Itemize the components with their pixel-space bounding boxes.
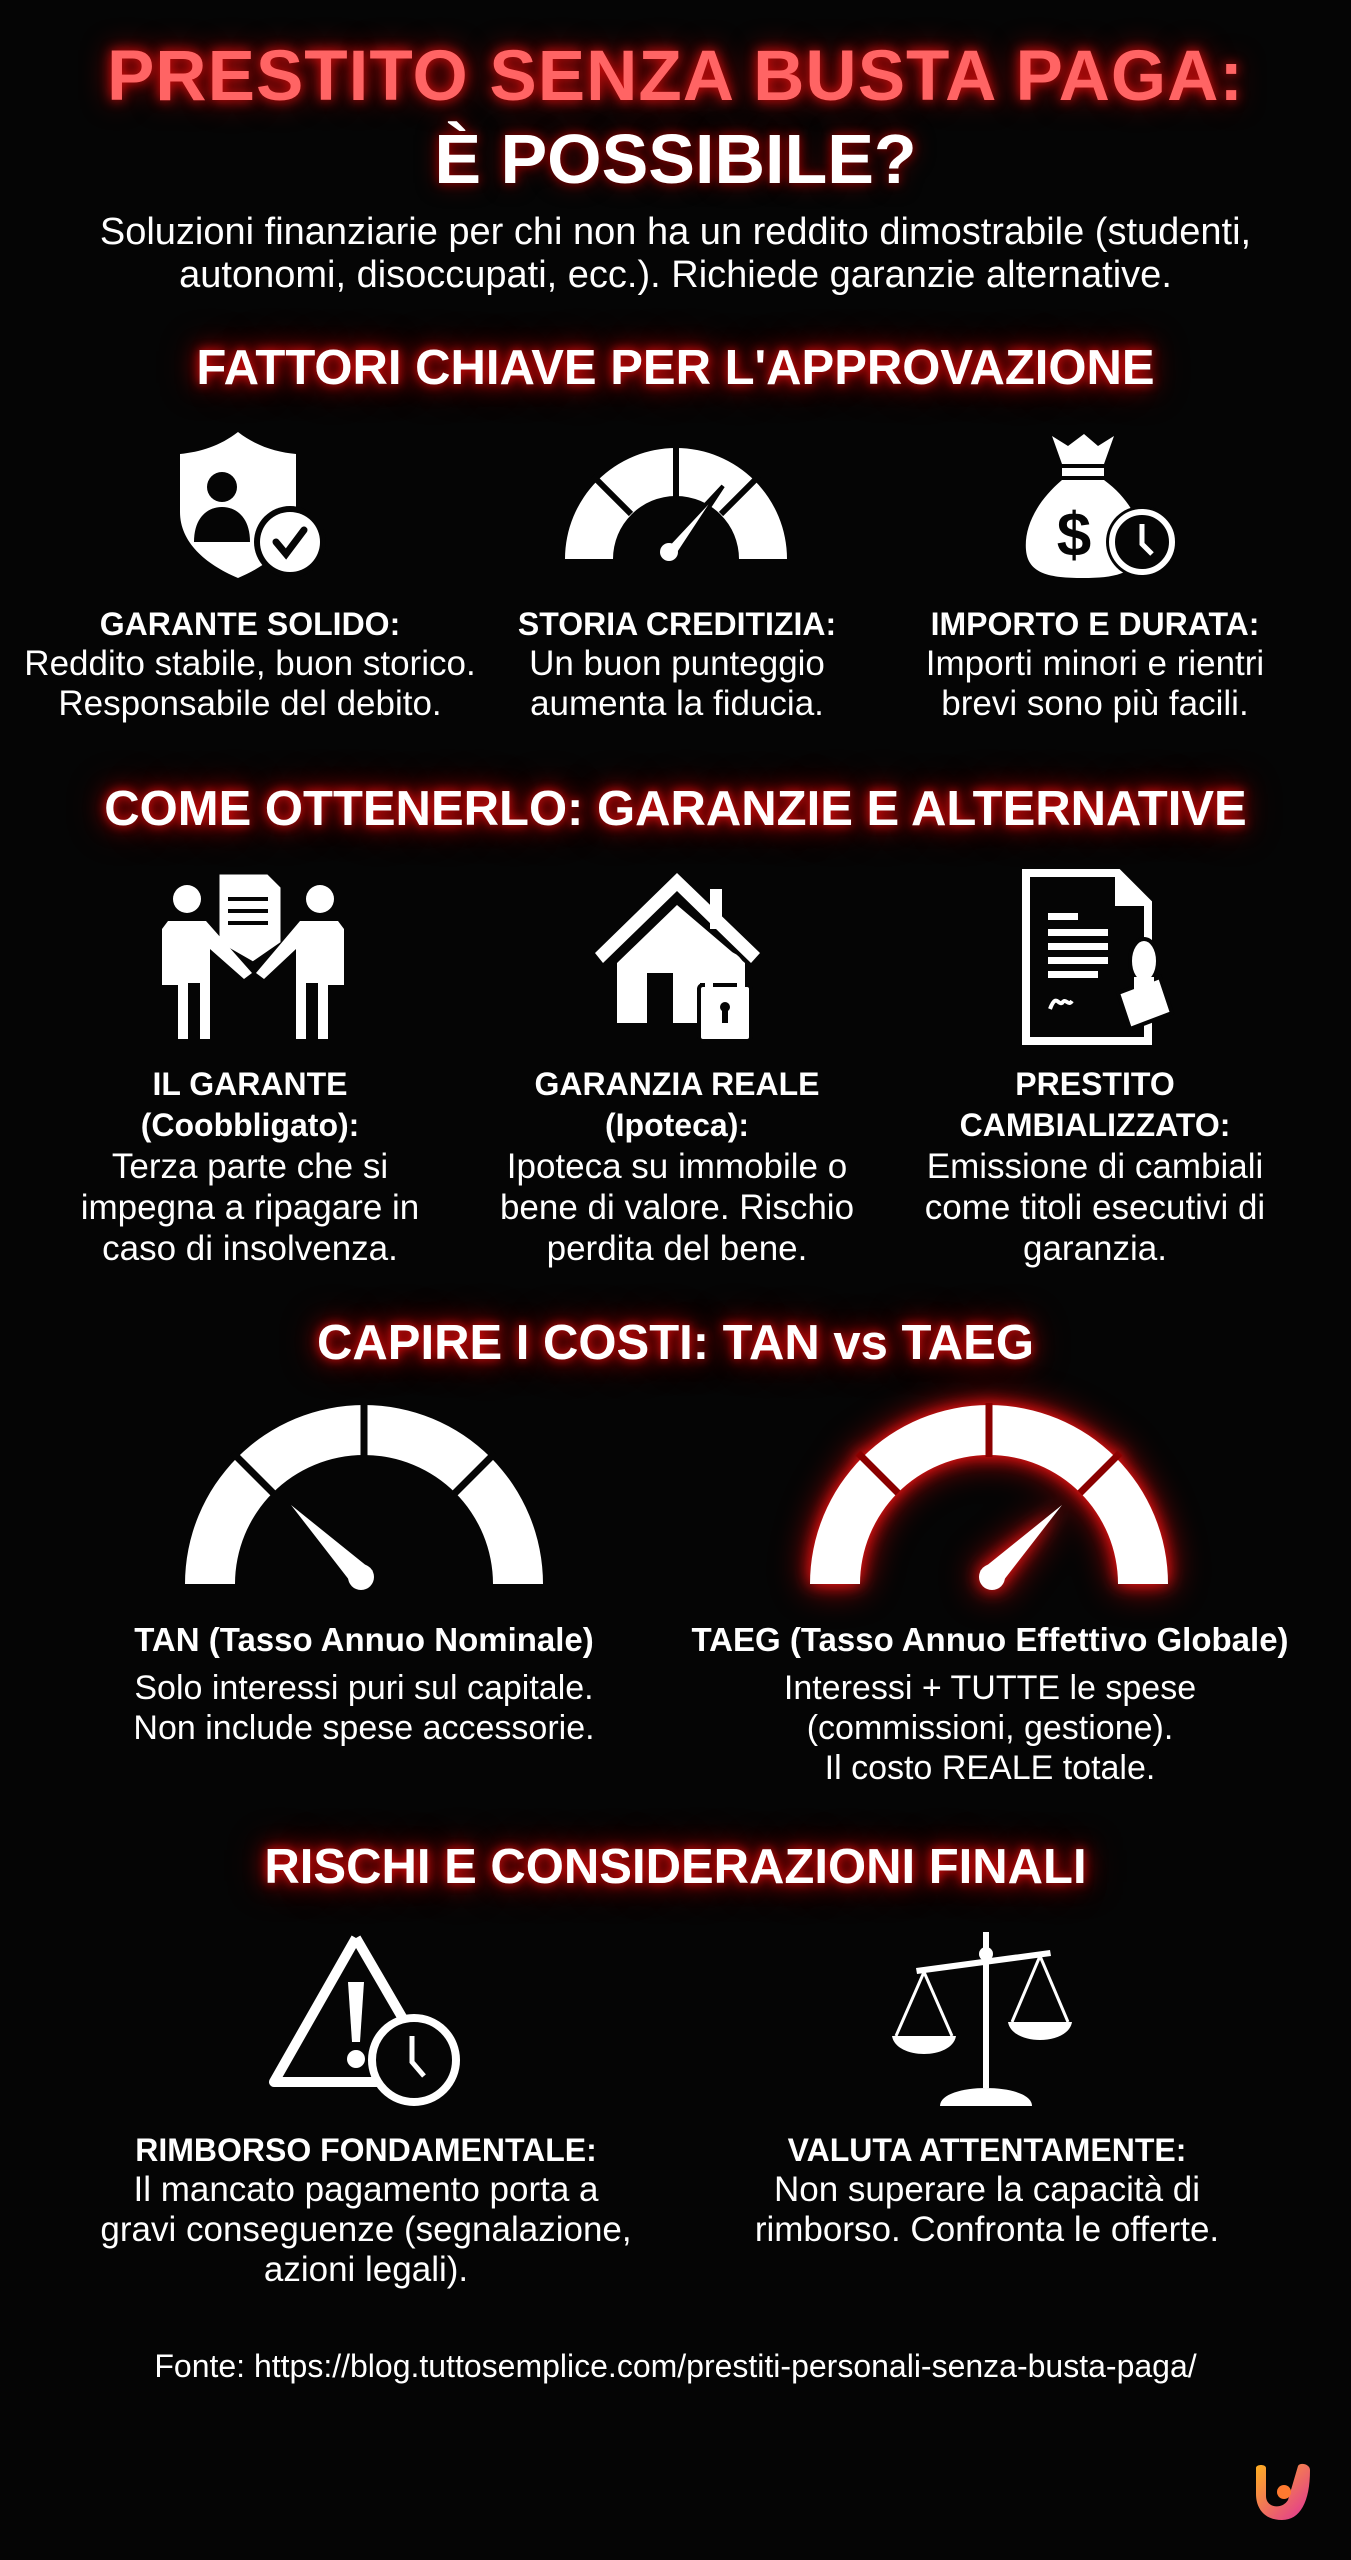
subtitle text <box>100 211 1251 296</box>
icon: document with stamp <box>1022 869 1170 1045</box>
text: prestito cambializzato: PRESTITO <box>1015 1066 1175 1102</box>
text: garanzia reale: perdita del bene. <box>547 1229 807 1268</box>
text: garanzia reale: GARANZIA REALE <box>534 1066 820 1102</box>
text: il garante: impegna a ripagare in <box>81 1188 419 1227</box>
text: storia creditizia <box>518 606 836 723</box>
logo <box>1256 2464 1310 2520</box>
text: garanzia reale: Ipoteca su immobile o <box>507 1147 847 1186</box>
text: TAEG: Il costo REALE totale. <box>825 1749 1155 1787</box>
icon: money bag with clock: $ <box>1057 501 1091 570</box>
text: rimborso fondamentale: RIMBORSO FONDAMENTALE: <box>135 2132 597 2168</box>
heading: rischi: RISCHI E CONSIDERAZIONI FINALI <box>264 1840 1087 1894</box>
source footnote: Fonte: https://blog.tuttosemplice.com/prestiti-personali-senza-busta-paga/ <box>154 2348 1197 2384</box>
text: TAN <box>133 1621 595 1747</box>
chart: TAEG gauge (red glow) <box>784 1376 1194 1612</box>
text: prestito cambializzato: garanzia. <box>1023 1229 1167 1268</box>
text: prestito cambializzato: CAMBIALIZZATO: <box>960 1107 1230 1143</box>
text: garante solido: GARANTE SOLIDO: <box>100 606 400 642</box>
text: garante solido: Responsabile del debito. <box>58 684 442 723</box>
text: TAEG <box>691 1621 1289 1787</box>
text: prestito cambializzato <box>925 1066 1265 1268</box>
text: storia creditizia: aumenta la fiducia. <box>530 684 824 723</box>
text: garante solido <box>24 606 476 723</box>
text: TAEG: (commissioni, gestione). <box>807 1709 1173 1747</box>
text: importo e durata: Importi minori e rientri <box>926 644 1264 683</box>
text: garanzia reale: (Ipoteca): <box>605 1107 749 1143</box>
text: rimborso fondamentale: Il mancato pagamento porta a <box>133 2170 598 2209</box>
text: importo e durata: brevi sono più facili. <box>941 684 1249 723</box>
text: TAEG: Interessi + TUTTE le spese <box>784 1669 1196 1707</box>
icon: credit gauge <box>565 448 787 561</box>
icon: money bag with clock <box>1026 434 1175 578</box>
heading: fattori chiave: FATTORI CHIAVE PER L'APPROVAZIONE <box>196 341 1155 395</box>
text: storia creditizia: Un buon punteggio <box>529 644 825 683</box>
text: TAEG: TAEG (Tasso Annuo Effettivo Globale) <box>691 1621 1289 1658</box>
text: TAN: Non include spese accessorie. <box>133 1709 595 1747</box>
title: PRESTITO SENZA BUSTA PAGA: <box>107 37 1244 116</box>
icon: two people handshake with document <box>162 874 344 1039</box>
text: garanzia reale: bene di valore. Rischio <box>500 1188 854 1227</box>
text: garante solido: Reddito stabile, buon storico. <box>24 644 476 683</box>
text: il garante: caso di insolvenza. <box>102 1229 398 1268</box>
text: valuta attentamente: rimborso. Confronta le offerte. <box>755 2210 1219 2249</box>
text: il garante: IL GARANTE <box>153 1066 347 1102</box>
heading: capire i costi: CAPIRE I COSTI: TAN vs TAEG <box>317 1316 1034 1370</box>
text: storia creditizia: STORIA CREDITIZIA: <box>518 606 836 642</box>
text: il garante: (Coobbligato): <box>141 1107 359 1143</box>
text: prestito cambializzato: Emissione di cambiali <box>927 1147 1263 1186</box>
title: È POSSIBILE? <box>434 120 917 198</box>
icon: warning triangle with clock <box>269 1936 460 2106</box>
title <box>92 31 1248 198</box>
icon: balance scale <box>892 1932 1072 2106</box>
chart: TAN gauge <box>185 1405 543 1590</box>
subtitle text: Soluzioni finanziarie per chi non ha un reddito dimostrabile (studenti, <box>100 211 1251 253</box>
heading: come ottenerlo: COME OTTENERLO: GARANZIE E ALTERNATIVE <box>104 782 1247 836</box>
text: rimborso fondamentale: azioni legali). <box>264 2250 468 2289</box>
subtitle text: autonomi, disoccupati, ecc.). Richiede garanzie alternative. <box>179 254 1172 296</box>
text: rimborso fondamentale: gravi conseguenze (segnalazione, <box>100 2210 632 2249</box>
text: valuta attentamente: Non superare la capacità di <box>774 2170 1200 2209</box>
text: TAN: TAN (Tasso Annuo Nominale) <box>134 1621 594 1658</box>
text: garanzia reale <box>500 1066 854 1268</box>
text: importo e durata <box>926 606 1264 723</box>
text: il garante <box>81 1066 419 1268</box>
icon: shield with person <box>180 432 320 578</box>
text: rimborso fondamentale <box>100 2132 632 2289</box>
text: valuta attentamente <box>755 2132 1219 2249</box>
icon: house with padlock <box>595 873 760 1039</box>
text: il garante: Terza parte che si <box>112 1147 388 1186</box>
text: valuta attentamente: VALUTA ATTENTAMENTE: <box>788 2132 1186 2168</box>
text: importo e durata: IMPORTO E DURATA: <box>931 606 1259 642</box>
text: TAN: Solo interessi puri sul capitale. <box>134 1669 594 1707</box>
text: prestito cambializzato: come titoli esecutivi di <box>925 1188 1265 1227</box>
